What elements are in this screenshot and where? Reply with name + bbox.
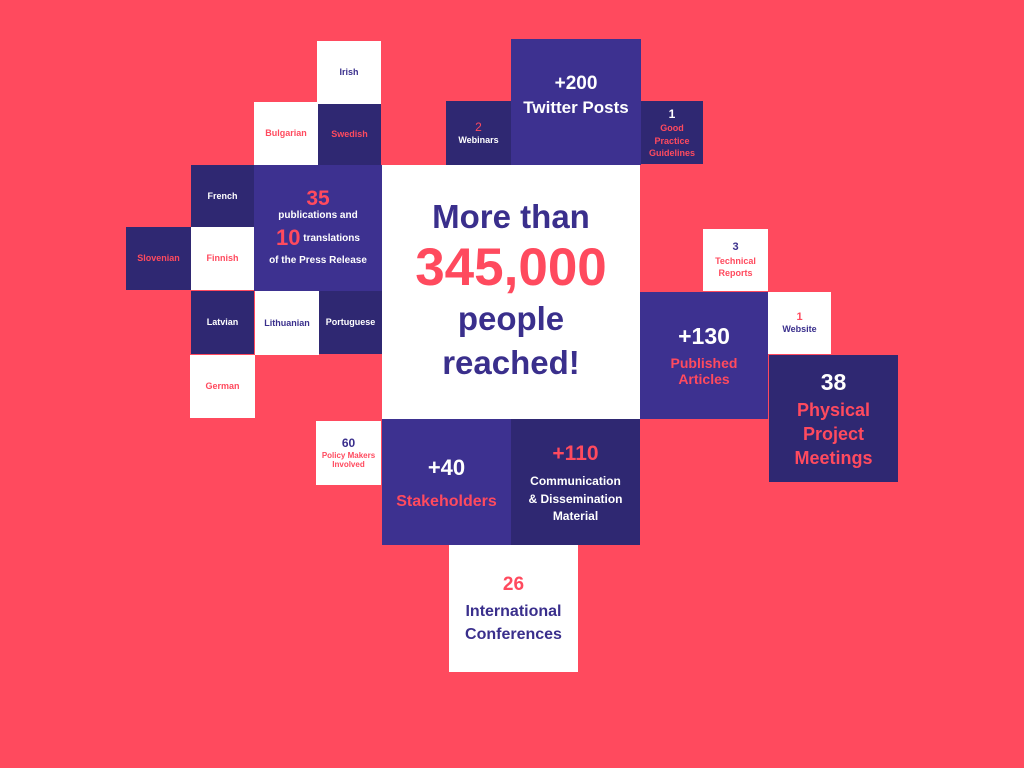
tile: policy makers: 60 bbox=[342, 436, 355, 450]
tile: international conferences bbox=[449, 545, 578, 672]
tile: good practice guidelines: Practice bbox=[654, 136, 690, 146]
tile: Finnish: Finnish bbox=[206, 253, 238, 263]
tile: policy makers: Policy Makers bbox=[322, 451, 375, 460]
tile: published articles: Articles bbox=[678, 371, 730, 387]
tile: published articles: +130 bbox=[678, 323, 730, 349]
tile: press publications: 35 bbox=[306, 187, 330, 210]
tile: Swedish bbox=[318, 104, 381, 165]
tile: Latvian bbox=[191, 291, 254, 354]
tile: physical project meetings: 38 bbox=[821, 369, 846, 395]
tile: Portuguese bbox=[319, 291, 382, 354]
tile: physical project meetings: Meetings bbox=[794, 448, 872, 468]
tile: Latvian: Latvian bbox=[207, 317, 238, 327]
tile: communication material: +110 bbox=[552, 442, 599, 465]
tile: press publications: publications and of the Press Release bbox=[269, 210, 367, 266]
tile: Slovenian bbox=[126, 227, 191, 290]
tile: webinars bbox=[446, 101, 511, 165]
tile: stakeholders: +40 bbox=[428, 454, 465, 480]
tile: physical project meetings bbox=[769, 355, 898, 482]
center: people reached bbox=[382, 165, 640, 419]
tile: website: 1 bbox=[796, 311, 803, 323]
tile: press publications bbox=[254, 165, 382, 291]
tile: international conferences: 26 bbox=[503, 574, 524, 595]
tile: technical reports: Technical bbox=[715, 256, 756, 266]
tile: Irish: Irish bbox=[339, 67, 358, 77]
tile: Lithuanian: Lithuanian bbox=[264, 318, 310, 328]
tile: technical reports: 3 bbox=[732, 241, 739, 253]
tile: published articles: Published bbox=[671, 354, 737, 370]
tile: Slovenian: Slovenian bbox=[137, 253, 180, 263]
tile: website bbox=[768, 292, 831, 354]
tile: good practice guidelines: 1 bbox=[669, 107, 675, 121]
tile: Bulgarian bbox=[254, 102, 318, 165]
tile: stakeholders: Stakeholders bbox=[396, 492, 497, 510]
tile: communication material: & Dissemination bbox=[528, 492, 623, 506]
tile: good practice guidelines: Guidelines bbox=[649, 148, 695, 158]
tile: twitter posts bbox=[511, 39, 641, 165]
tile: policy makers: Involved bbox=[332, 460, 365, 469]
tile: technical reports bbox=[703, 229, 768, 291]
tile: French bbox=[191, 165, 254, 227]
tile: good practice guidelines bbox=[641, 101, 703, 164]
tile: policy makers bbox=[316, 421, 381, 485]
tile: published articles bbox=[640, 292, 768, 419]
tile: Lithuanian bbox=[255, 291, 319, 355]
tile: communication material: Material bbox=[553, 509, 598, 523]
tile: physical project meetings: Physical bbox=[797, 400, 870, 420]
tile: German bbox=[190, 355, 255, 418]
tile: technical reports: Reports bbox=[718, 268, 752, 278]
tile: German: German bbox=[205, 381, 240, 391]
tile: Irish bbox=[317, 41, 381, 104]
tile: twitter posts: Twitter Posts bbox=[523, 98, 629, 117]
tile: French: French bbox=[207, 191, 238, 201]
center: people reached: reached! bbox=[442, 344, 580, 381]
tile: Swedish: Swedish bbox=[331, 129, 368, 139]
tile: webinars: 2 bbox=[475, 120, 482, 134]
tile: press publications: 10 translations bbox=[276, 225, 360, 250]
tile: twitter posts: +200 bbox=[555, 73, 597, 94]
tile: Bulgarian: Bulgarian bbox=[265, 128, 307, 138]
center: people reached: people bbox=[458, 300, 564, 337]
tile: good practice guidelines: Good bbox=[660, 123, 684, 133]
center: people reached: More than bbox=[432, 198, 590, 235]
center: people reached: 345,000 bbox=[415, 238, 607, 297]
tile: Portuguese: Portuguese bbox=[326, 317, 375, 327]
tile: stakeholders bbox=[382, 419, 511, 545]
tile: webinars: Webinars bbox=[458, 135, 499, 145]
tile: international conferences: International bbox=[465, 603, 562, 620]
tile: communication material bbox=[511, 419, 640, 545]
tile: website: Website bbox=[782, 324, 817, 334]
tile: international conferences: Conferences bbox=[465, 626, 562, 643]
tile: Finnish bbox=[191, 227, 254, 290]
tile: physical project meetings: Project bbox=[803, 424, 864, 444]
tile: communication material: Communication bbox=[530, 474, 621, 488]
